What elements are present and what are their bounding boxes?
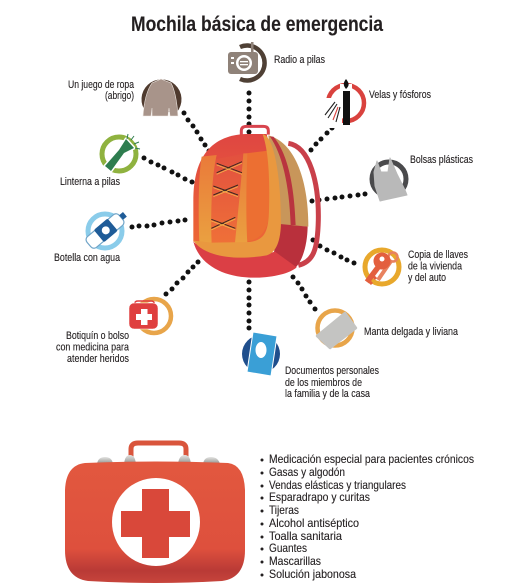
label: Documentos personales [285,365,379,377]
icon: orange ring [137,299,171,333]
icon: red kit [129,301,158,329]
label line three: la familia y de la casa [285,388,371,400]
item: keys [365,249,468,284]
lacing [211,162,242,230]
item: flashlight [60,134,140,188]
item: radio [228,42,325,80]
list bullets [260,458,264,576]
list item: Vendas elásticas y triangulares [269,478,406,492]
label line two: con medicina para [56,342,130,354]
label: Un juego de ropa [68,79,135,91]
icon: keys [367,252,398,284]
item: candles and matches [324,79,431,128]
icon: radio body [228,42,258,74]
case body [65,462,245,583]
label: Manta delgada y liviana [364,326,459,338]
middle gold strap [235,153,247,243]
list item: Esparadrapo y curitas [269,490,370,504]
icon: candle [340,79,352,125]
item: clothes [68,79,182,116]
label line two: (abrigo) [105,90,134,102]
label line three: y del auto [408,272,446,284]
case clasps [97,455,220,464]
icon: green ring [102,137,136,171]
icon: yellow ring [365,250,399,284]
item: first aid kit [56,299,171,365]
icon: matches [324,98,342,128]
icon: flashlight [105,134,140,171]
lower pocket [274,224,308,268]
icon: red ring [328,85,364,121]
icon: blanket card [317,313,356,348]
first aid case illustration [65,443,245,583]
icon: bottle [84,208,130,251]
list item: Alcohol antiséptico [269,516,359,530]
gold side and base trim [193,134,281,258]
icon: blue ring [88,214,122,248]
list item: Solución jabonosa [269,567,356,581]
back panel [268,135,308,227]
list item: Medicación especial para pacientes crónicos [269,452,474,466]
red cross [121,489,190,558]
back stripe [270,137,296,225]
icon: document [247,332,277,376]
label: Bolsas plásticas [410,154,473,166]
icon: radio ring [240,45,265,80]
label: Linterna a pilas [60,176,120,188]
case handle [131,443,186,462]
icon: navy ring [242,335,280,373]
item: plastic bags [372,154,473,201]
backpack illustration [193,126,318,278]
list item: Toalla sanitaria [269,529,342,543]
dotted connectors from backpack to items [130,90,368,330]
item: documents [242,332,379,400]
icon: dark ring [372,162,406,196]
shoulder strap [288,143,318,265]
front body [193,134,274,253]
left gold strap [199,155,217,243]
list item: Tijeras [269,503,299,517]
label: Botella con agua [54,252,121,264]
label: Velas y fósforos [369,89,431,101]
label: Radio a pilas [274,54,325,66]
label line three: atender heridos [67,353,129,365]
label: Botiquín o bolso [66,330,129,342]
icon: sweater [143,79,178,116]
right front panel [245,151,270,242]
item: water bottle [54,208,130,264]
icon: bag [374,158,407,201]
centre front panel [212,153,245,243]
list item: Gasas y algodón [269,465,345,479]
supplies list [260,452,474,581]
title: Mochila básica de emergencia [131,13,383,36]
icon: brown ring [142,79,182,112]
item: blanket [317,310,459,348]
list item: Guantes [269,541,307,555]
label line two: de los miembros de [285,377,362,389]
label: Copia de llaves [408,249,468,261]
bottom panel [193,242,297,278]
icon: orange ring [318,310,352,346]
top handle [241,126,268,135]
label line two: de la vivienda [408,260,463,272]
white circle [112,478,200,566]
list item: Mascarillas [269,554,321,568]
